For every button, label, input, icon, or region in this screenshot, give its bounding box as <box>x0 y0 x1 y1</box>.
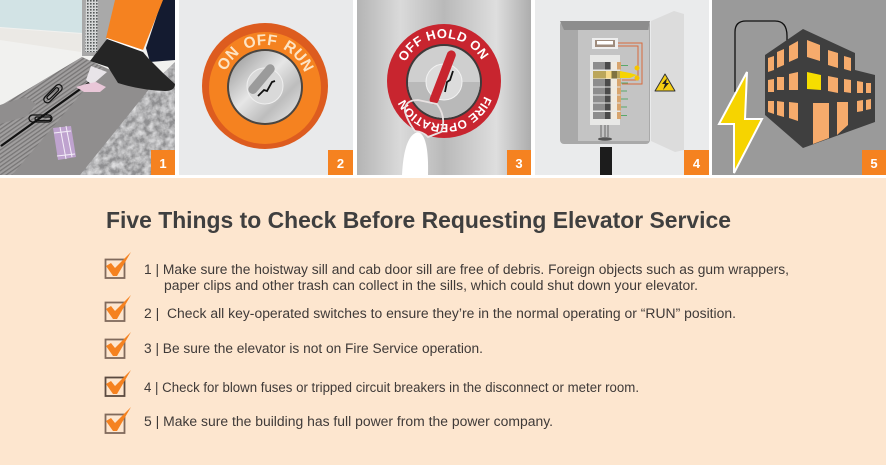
fire switch dial: FIRE OPERATION <box>398 96 492 132</box>
badge 2: 2 <box>337 156 344 171</box>
item 2 <box>106 295 736 321</box>
panel 1: debris in sill <box>0 0 175 175</box>
item 4: 4 | Check for blown fuses or tripped circuit breakers in the disconnect or meter room. <box>144 380 639 395</box>
fire switch dial: OFF HOLD ON <box>399 29 489 60</box>
icon: warning sign <box>655 74 675 91</box>
icon: gum wrapper <box>53 126 76 160</box>
badge 4 <box>684 150 709 175</box>
item 1: 1 | Make sure the hoistway sill and cab door sill are free of debris. Foreign objects such as gum wrappers, <box>144 262 789 277</box>
item 1 <box>106 252 789 293</box>
item 5: 5 | Make sure the building has full power from the power company. <box>144 414 553 429</box>
panel 4: breaker box <box>535 0 709 175</box>
building <box>765 29 875 148</box>
breaker cabinet <box>560 21 650 144</box>
item 3 <box>106 332 483 358</box>
item 4 <box>106 370 639 396</box>
cabinet door <box>651 11 684 152</box>
item 1: paper clips and other trash can collect in the sills, which could shut down your elevator. <box>164 278 698 293</box>
item 2: 2 | Check all key-operated switches to ensure they’re in the normal operating or “RUN” position. <box>144 306 736 321</box>
power cable <box>735 21 787 92</box>
badge 5: 5 <box>870 156 878 171</box>
icon: paper clips <box>29 83 64 122</box>
switch dial <box>202 23 328 149</box>
badge 1: 1 <box>159 156 167 171</box>
breaker rows <box>593 62 621 119</box>
badge 4: 4 <box>693 156 701 171</box>
badge 3: 3 <box>515 156 523 171</box>
leg and shoe <box>90 0 175 91</box>
icon: lightning bolt <box>719 72 762 173</box>
background panel <box>0 178 886 465</box>
badge 3 <box>507 150 531 175</box>
switch dial: ON OFF RUN <box>218 34 314 72</box>
panel 3: fire service switch <box>357 0 531 175</box>
badge 2 <box>328 150 353 175</box>
badge 1 <box>151 150 175 175</box>
title: Five Things to Check Before Requesting Elevator Service <box>106 207 731 233</box>
badge 5 <box>862 150 886 175</box>
panel 2: key switch on RUN <box>179 0 353 175</box>
checklist <box>106 252 789 433</box>
item 3: 3 | Be sure the elevator is not on Fire Service operation. <box>144 341 483 356</box>
panel 5: building and power <box>712 0 886 175</box>
icon: finger turning key <box>402 100 443 175</box>
item 5 <box>106 407 553 433</box>
fire switch dial <box>387 24 501 138</box>
